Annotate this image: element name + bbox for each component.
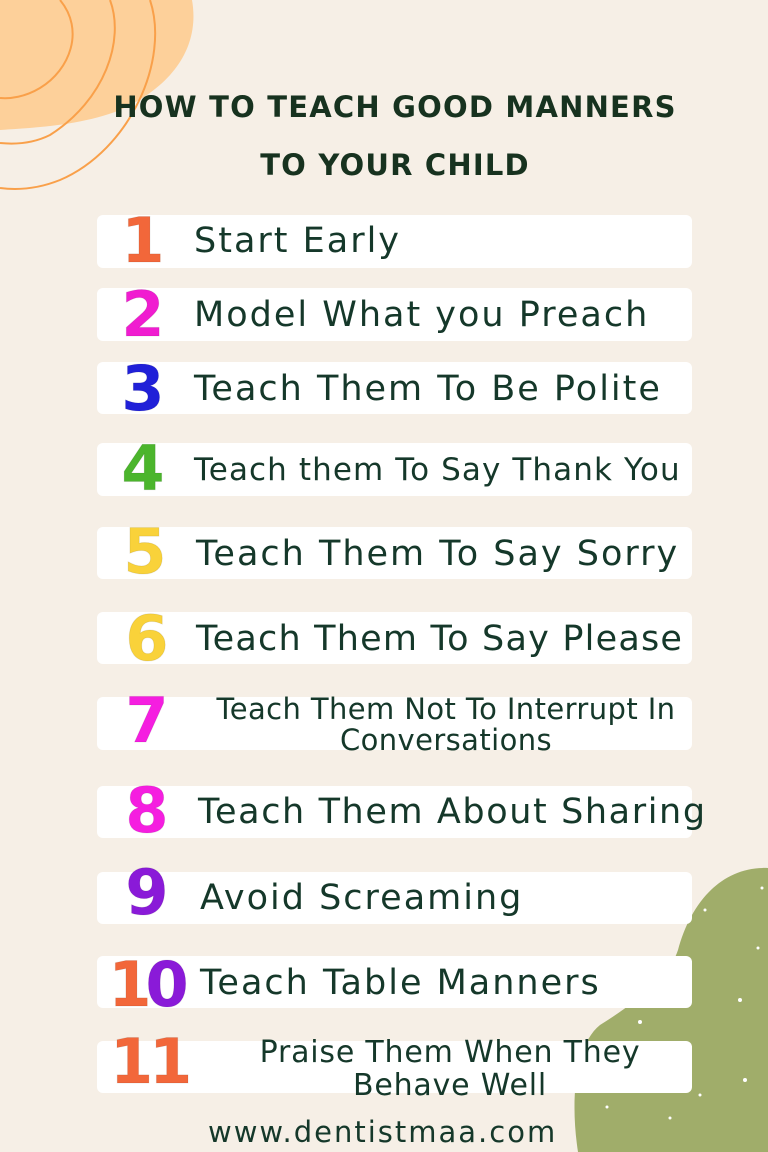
item 11 [97,1025,692,1103]
text: Teach them To Say Thank You [194,452,681,488]
text: 11 [110,1025,188,1098]
text: Behave Well [353,1068,547,1103]
text: Teach Them To Say Please [196,619,683,659]
text: 7 [125,684,169,757]
text: Teach Table Manners [200,963,601,1003]
item 7 [97,684,692,757]
decoration: green blob [574,868,768,1152]
text: 4 [121,432,165,505]
text: Teach Them About Sharing [198,792,707,832]
text: 10 [108,948,183,1021]
text: Conversations [340,723,552,757]
item 10 [97,948,692,1021]
item 2 [97,278,692,351]
item 6 [97,602,692,675]
text: 6 [125,602,169,675]
footer url: www.dentistmaa.com [208,1115,557,1149]
title: HOW TO TEACH GOOD MANNERS [113,90,677,124]
text: 3 [121,352,165,425]
item 4 [97,432,692,505]
item 8 [97,774,707,847]
text: 8 [125,774,169,847]
text: Teach Them Not To Interrupt In [217,692,675,726]
text: 5 [123,515,167,588]
text: 1 [121,204,165,277]
item 9 [97,856,692,929]
title: TO YOUR CHILD [260,148,530,182]
title [113,90,677,182]
item 5 [97,515,692,588]
text: 2 [121,278,165,351]
text: Teach Them To Say Sorry [196,534,679,574]
item 3 [97,352,692,425]
text: Model What you Preach [194,295,649,335]
text: 9 [125,856,169,929]
item 1 [97,204,692,277]
text: Teach Them To Be Polite [194,369,662,409]
text: Start Early [194,221,401,261]
text: Avoid Screaming [200,878,523,918]
text: Praise Them When They [260,1035,640,1070]
